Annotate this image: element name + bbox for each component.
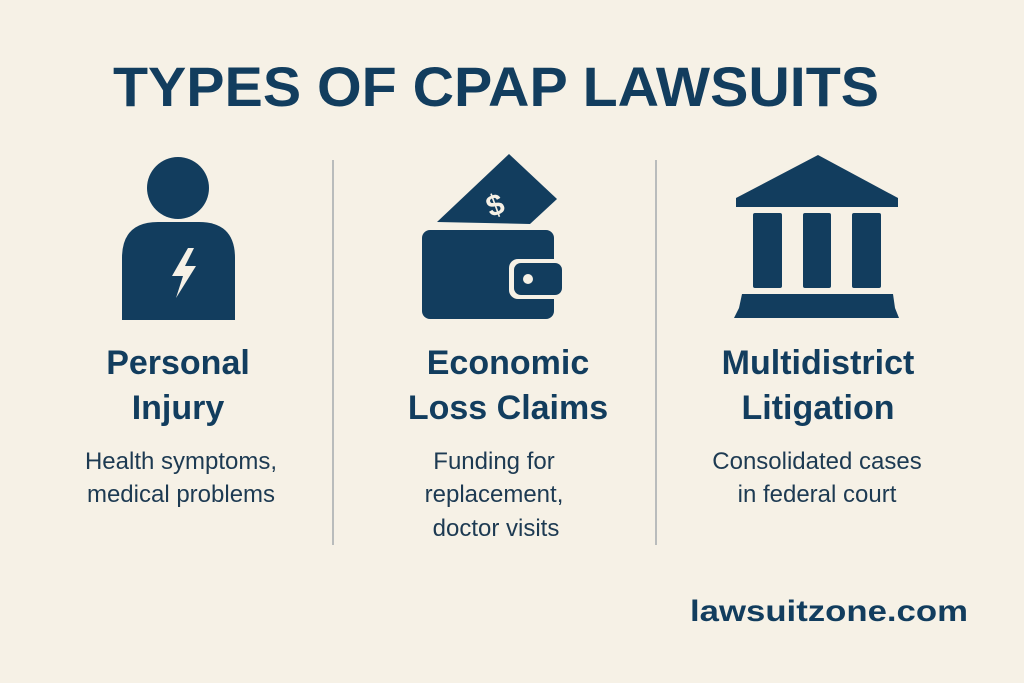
text: economic description: [425, 448, 563, 542]
text: multidistrict description: in federal court: [738, 481, 897, 508]
text: personal injury description: Health symptoms,: [85, 448, 277, 475]
panel: personal injury: [85, 157, 277, 508]
icon: person: [122, 157, 235, 320]
panel: multidistrict litigation: Litigation: [742, 389, 894, 427]
text: economic description: replacement,: [425, 481, 563, 508]
text: multidistrict description: Consolidated cases: [712, 448, 922, 475]
heading: multidistrict litigation: Multidistrict: [722, 344, 914, 382]
heading: personal injury: Personal: [106, 344, 250, 382]
text: personal injury description: [85, 448, 277, 508]
text: economic description: Funding for: [433, 448, 555, 475]
panel: economic loss: [408, 154, 608, 542]
panel: multidistrict litigation: [712, 155, 922, 508]
heading: economic loss claims: Economic: [427, 344, 589, 382]
text: personal injury description: medical problems: [87, 481, 275, 508]
footer: website: lawsuitzone.com: [690, 595, 968, 628]
icon: wallet: $: [482, 187, 509, 224]
icon: courthouse: [734, 155, 899, 318]
text: multidistrict description: [712, 448, 922, 508]
text: economic description: doctor visits: [433, 515, 559, 542]
panel: economic loss: Loss Claims: [408, 389, 608, 427]
panel: personal injury: Injury: [132, 389, 224, 427]
icon: wallet: [422, 154, 564, 319]
title: TYPES OF CPAP LAWSUITS: [113, 55, 879, 118]
